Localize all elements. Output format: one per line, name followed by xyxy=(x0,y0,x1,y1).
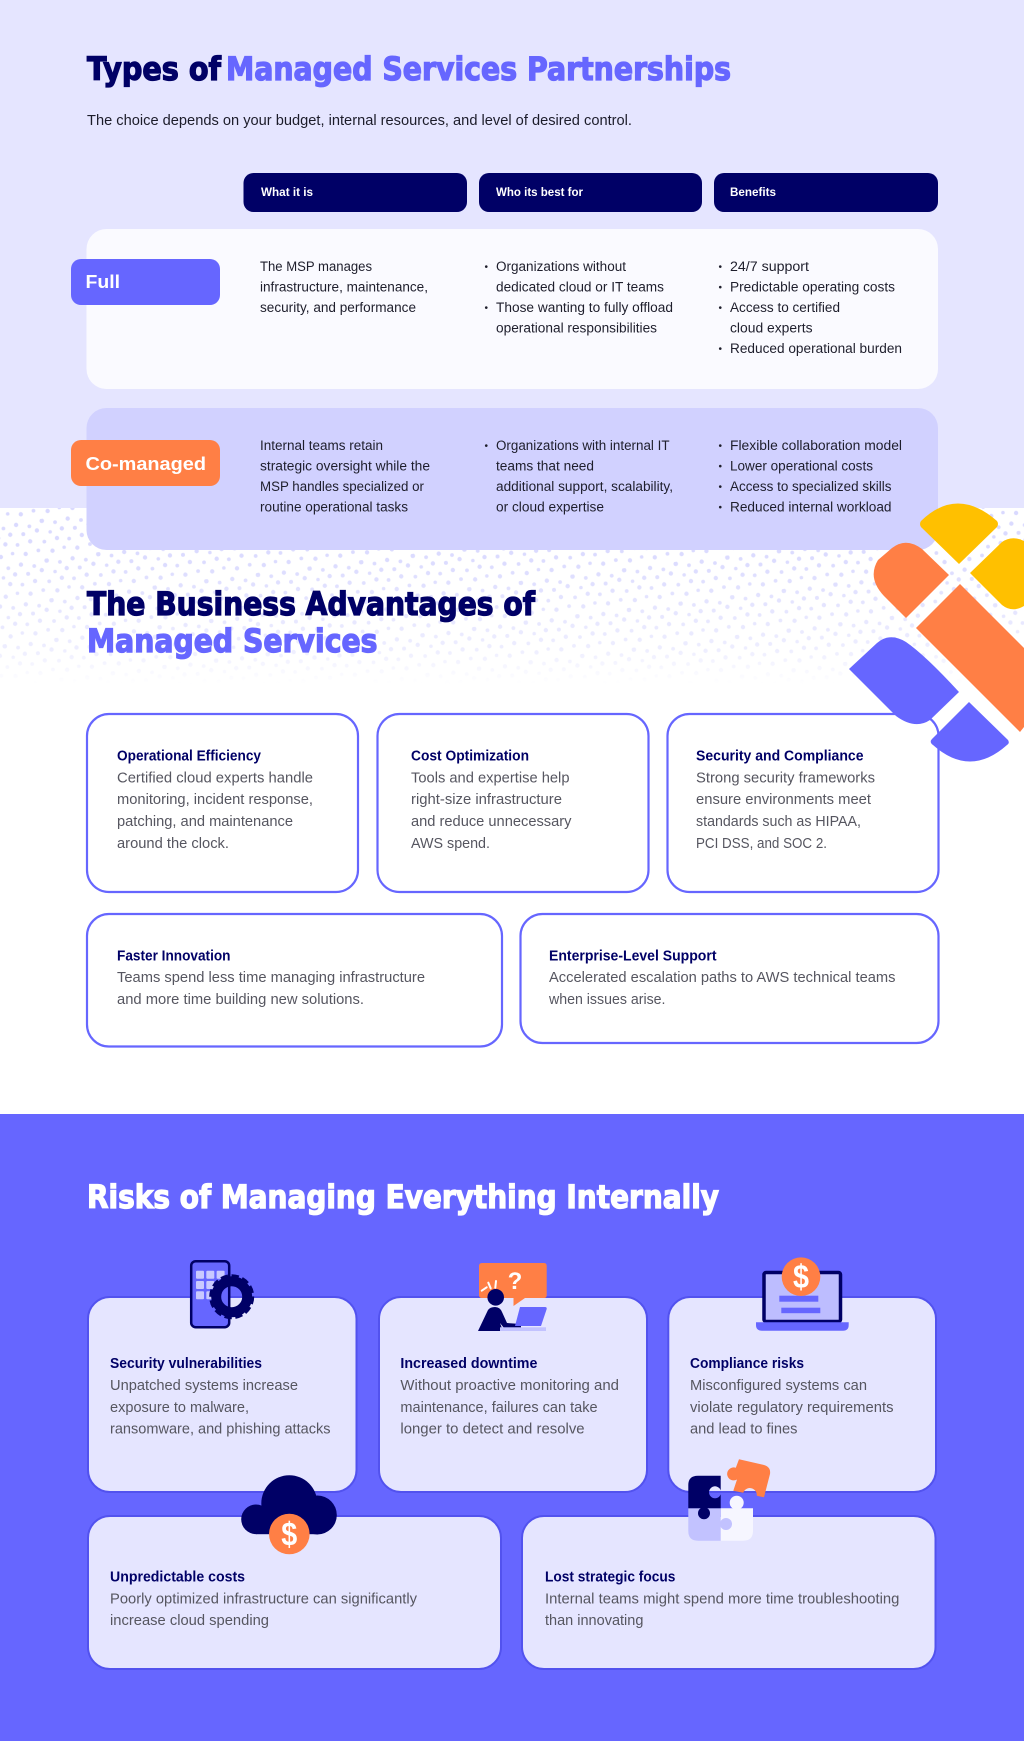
panel: risks section background xyxy=(0,1114,1024,1741)
co-managed: what it is: strategic oversight while the xyxy=(260,458,430,474)
co-managed: benefits: Reduced internal workload xyxy=(730,500,892,514)
co-managed: what it is: routine operational tasks xyxy=(260,500,408,514)
panel: lavender header background xyxy=(0,0,1024,508)
full: benefits: Reduced operational burden xyxy=(730,341,902,356)
full: benefits: Predictable operating costs xyxy=(730,280,895,294)
co-managed: who it is best for: or cloud expertise xyxy=(496,500,604,514)
icon: phone with gear xyxy=(191,1261,252,1327)
card: security and compliance: PCI DSS, and SOC 2. xyxy=(696,836,827,852)
card: compliance risks: and lead to fines xyxy=(690,1422,798,1438)
card: security and compliance xyxy=(668,714,938,892)
full: benefits: cloud experts xyxy=(730,320,813,336)
icon: person with question and laptop: ? xyxy=(508,1268,522,1295)
card: increased downtime: longer to detect and resolve xyxy=(400,1422,585,1438)
card: operational efficiency: Operational Efficiency xyxy=(117,748,261,764)
card: lost strategic focus xyxy=(522,1516,936,1669)
card: security and compliance: Security and Compliance xyxy=(696,748,864,764)
co-managed: who it is best for: Organizations with internal IT xyxy=(496,438,670,453)
card: lost strategic focus: Internal teams might spend more time troubleshooting xyxy=(545,1592,899,1608)
card: cost optimization: Tools and expertise help xyxy=(411,770,570,786)
full: benefits: • xyxy=(718,262,722,273)
full: who it is best for xyxy=(484,259,673,336)
card: compliance risks: Compliance risks xyxy=(690,1356,804,1372)
title: types of partnerships: Managed Services Partnerships xyxy=(226,50,731,88)
co-managed: benefits: • xyxy=(718,462,722,472)
full: benefits: • xyxy=(718,282,722,294)
heading: business advantages: Managed Services xyxy=(87,622,378,660)
card: security and compliance: Strong security frameworks xyxy=(696,770,875,786)
full: what it is: security, and performance xyxy=(260,300,416,315)
badge: co-managed: Co-managed xyxy=(86,453,206,474)
panel: full partnership row xyxy=(71,229,938,389)
card: enterprise-level support: Accelerated escalation paths to AWS technical teams xyxy=(549,970,896,986)
full: benefits: Access to certified xyxy=(730,300,840,315)
card: compliance risks: Misconfigured systems can xyxy=(690,1378,867,1394)
icon: cloud with dollar xyxy=(241,1475,337,1554)
card: unpredictable costs: Poorly optimized infrastructure can significantly xyxy=(110,1592,418,1608)
card: faster innovation xyxy=(87,914,502,1046)
card: security vulnerabilities: exposure to malware, xyxy=(110,1400,249,1416)
icon: person with question and laptop xyxy=(478,1263,547,1331)
card: security vulnerabilities: Unpatched systems increase xyxy=(110,1378,298,1394)
co-managed: benefits: Flexible collaboration model xyxy=(730,438,902,453)
card: cost optimization: right-size infrastructure xyxy=(411,792,562,808)
co-managed: who it is best for xyxy=(484,438,673,514)
card: compliance risks: violate regulatory requirements xyxy=(690,1400,894,1416)
heading: risks: Risks of Managing Everything Internally xyxy=(87,1178,719,1216)
heading: business advantages: The Business Advantages of xyxy=(87,585,536,623)
card: increased downtime xyxy=(379,1297,647,1492)
full: benefits: 24/7 support xyxy=(730,259,809,274)
full: benefits xyxy=(718,259,902,356)
title: types of partnerships: Types of xyxy=(87,50,222,88)
card: operational efficiency xyxy=(87,714,358,892)
card: increased downtime: Without proactive monitoring and xyxy=(400,1378,619,1394)
card: enterprise-level support: Enterprise-Level Support xyxy=(549,948,717,964)
card: enterprise-level support xyxy=(520,914,938,1043)
card: unpredictable costs: increase cloud spending xyxy=(110,1613,269,1629)
subtitle: The choice depends on your budget, internal resources, and level of desired control. xyxy=(87,112,632,129)
card: security vulnerabilities: ransomware, and phishing attacks xyxy=(110,1422,330,1438)
full: benefits: • xyxy=(718,344,722,355)
card: cost optimization: Cost Optimization xyxy=(411,748,529,764)
table header row: What it is xyxy=(261,187,313,199)
card: cost optimization xyxy=(378,714,648,892)
co-managed: benefits xyxy=(718,438,902,514)
table header row xyxy=(244,173,938,212)
co-managed: benefits: • xyxy=(718,502,722,514)
card: unpredictable costs: Unpredictable costs xyxy=(110,1570,245,1586)
card: increased downtime: Increased downtime xyxy=(400,1356,537,1372)
full: what it is: The MSP manages xyxy=(260,259,372,274)
full: benefits: • xyxy=(718,303,722,314)
panel: co-managed partnership row xyxy=(71,408,938,550)
full: who it is best for: operational responsibilities xyxy=(496,320,657,336)
card: increased downtime: maintenance, failures can take xyxy=(400,1400,598,1416)
co-managed: benefits: • xyxy=(718,441,722,452)
icon: laptop with dollar: $ xyxy=(793,1258,809,1295)
co-managed: who it is best for: teams that need xyxy=(496,458,594,474)
card: security vulnerabilities xyxy=(88,1297,356,1492)
card: lost strategic focus: Lost strategic focus xyxy=(545,1570,675,1586)
badge: co-managed xyxy=(71,440,220,486)
card: security and compliance: ensure environments meet xyxy=(696,792,871,808)
co-managed: who it is best for: additional support, scalability, xyxy=(496,479,673,494)
co-managed: what it is: Internal teams retain xyxy=(260,438,383,453)
co-managed: benefits: • xyxy=(718,482,722,493)
full: who it is best for: Organizations without xyxy=(496,259,626,274)
logo mark: decorative brand shape xyxy=(849,504,1024,762)
icon: cloud with dollar: $ xyxy=(281,1516,297,1552)
icon: laptop with dollar xyxy=(756,1257,849,1331)
card: cost optimization: and reduce unnecessary xyxy=(411,814,572,830)
card: compliance risks xyxy=(668,1297,936,1492)
co-managed: what it is xyxy=(260,438,430,514)
card: operational efficiency: around the clock. xyxy=(117,836,229,852)
co-managed: benefits: Access to specialized skills xyxy=(730,479,892,494)
card: unpredictable costs xyxy=(88,1516,501,1669)
card: faster innovation: Faster Innovation xyxy=(117,948,230,964)
card: enterprise-level support: when issues arise. xyxy=(548,992,666,1008)
full: who it is best for: dedicated cloud or IT teams xyxy=(496,280,664,294)
card: operational efficiency: monitoring, incident response, xyxy=(117,792,313,808)
card: operational efficiency: Certified cloud experts handle xyxy=(117,770,313,786)
table header row: Benefits xyxy=(730,187,776,199)
co-managed: what it is: MSP handles specialized or xyxy=(260,479,424,494)
badge: full: Full xyxy=(86,271,120,292)
card: security vulnerabilities: Security vulnerabilities xyxy=(110,1356,262,1372)
full: who it is best for: • xyxy=(484,262,488,273)
co-managed: benefits: Lower operational costs xyxy=(730,458,873,474)
full: what it is xyxy=(260,259,428,315)
card: security and compliance: standards such as HIPAA, xyxy=(696,814,861,830)
card: faster innovation: and more time building new solutions. xyxy=(117,992,364,1008)
full: what it is: infrastructure, maintenance, xyxy=(260,280,428,294)
co-managed: who it is best for: • xyxy=(484,441,488,452)
badge: full xyxy=(71,259,220,305)
full: who it is best for: • xyxy=(484,303,488,314)
icon: puzzle pieces xyxy=(688,1459,770,1541)
heading: business advantages xyxy=(87,585,536,660)
table header row: Who its best for xyxy=(496,187,584,199)
card: cost optimization: AWS spend. xyxy=(411,836,490,852)
card: lost strategic focus: than innovating xyxy=(545,1613,643,1629)
card: faster innovation: Teams spend less time managing infrastructure xyxy=(117,970,425,986)
card: operational efficiency: patching, and maintenance xyxy=(117,814,293,830)
full: who it is best for: Those wanting to fully offload xyxy=(496,300,673,315)
